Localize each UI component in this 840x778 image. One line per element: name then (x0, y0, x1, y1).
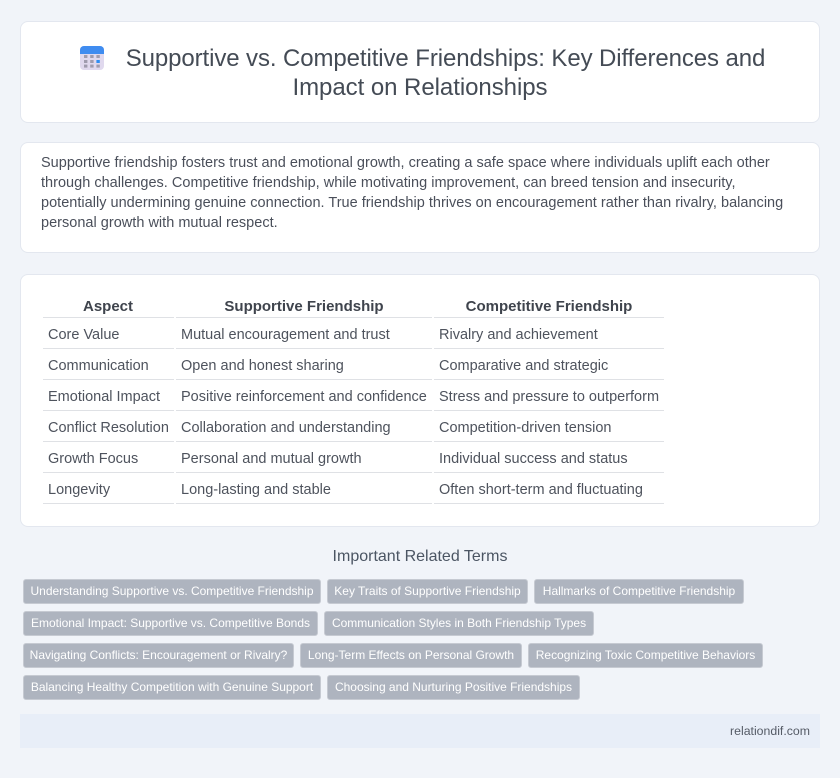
tag: Recognizing Toxic Competitive Behaviors (536, 648, 755, 662)
cell: competitive growth focus: Individual success and status (439, 451, 628, 467)
row: Communication: Communication (48, 358, 149, 374)
cell: supportive core value: Mutual encouragement and trust (181, 327, 390, 343)
tag (534, 579, 744, 604)
tag (23, 579, 321, 604)
panel: title header (20, 21, 820, 123)
footer bar (20, 714, 820, 748)
tag (300, 643, 522, 668)
tag: Balancing Healthy Competition with Genuine Support (31, 680, 313, 694)
cell: supportive longevity: Long-lasting and stable (181, 482, 331, 498)
row: Core Value: Core Value (48, 327, 119, 343)
tag: Navigating Conflicts: Encouragement or Rivalry? (30, 648, 287, 662)
text: summary line 4: personal growth with mutual respect. (41, 215, 278, 231)
tag: Emotional Impact: Supportive vs. Competitive Bonds (31, 616, 310, 630)
row: Longevity: Longevity (48, 482, 110, 498)
title second line: Impact on Relationships (292, 74, 548, 101)
footer source link: relationdif.com (730, 724, 810, 738)
cell: competitive emotional impact: Stress and pressure to outperform (439, 389, 659, 405)
text: summary line 2: through challenges. Competitive friendship, while motivating improvement, can breed tension and insecurity, (41, 175, 735, 191)
tag list: related terms (23, 579, 763, 700)
cell: supportive growth focus: Personal and mutual growth (181, 451, 362, 467)
text: summary line 1: Supportive friendship fosters trust and emotional growth, creating a safe space where individuals uplift each other (41, 155, 770, 171)
tag (23, 643, 294, 668)
table: comparison (43, 298, 664, 504)
icon: calendar (80, 46, 104, 70)
row: Growth Focus: Growth Focus (48, 451, 138, 467)
tag (324, 611, 594, 636)
tag (23, 675, 321, 700)
cell: supportive emotional impact: Positive reinforcement and confidence (181, 389, 427, 405)
heading: related terms: Important Related Terms (333, 548, 507, 565)
title: Supportive vs. Competitive Friendships: Key Differences and (126, 45, 765, 72)
tag: Long-Term Effects on Personal Growth (308, 648, 514, 662)
panel: comparison table (20, 274, 820, 527)
cell: competitive conflict resolution: Competition-driven tension (439, 420, 611, 436)
cell: competitive core value: Rivalry and achievement (439, 327, 598, 343)
tag: Choosing and Nurturing Positive Friendships (335, 680, 572, 694)
tag: Communication Styles in Both Friendship Types (332, 616, 586, 630)
tag (528, 643, 763, 668)
tag (327, 675, 580, 700)
tag (23, 611, 318, 636)
text: summary line 3: potentially undermining genuine connection. True friendship thrives on encouragement rather than rivalry, balancing (41, 195, 783, 211)
cell: supportive conflict resolution: Collaboration and understanding (181, 420, 391, 436)
cell: competitive communication: Comparative and strategic (439, 358, 608, 374)
cell: competitive longevity: Often short-term and fluctuating (439, 482, 643, 498)
row: Emotional Impact: Emotional Impact (48, 389, 160, 405)
tag (327, 579, 528, 604)
row: Conflict Resolution: Conflict Resolution (48, 420, 169, 436)
tag: Understanding Supportive vs. Competitive Friendship (31, 584, 313, 598)
table header: Competitive Friendship: Competitive Friendship (466, 298, 632, 315)
cell: supportive communication: Open and honest sharing (181, 358, 344, 374)
table header: Aspect: Aspect (83, 298, 133, 315)
panel: summary (20, 142, 820, 253)
tag: Key Traits of Supportive Friendship (334, 584, 521, 598)
tag: Hallmarks of Competitive Friendship (543, 584, 735, 598)
table header: Supportive Friendship: Supportive Friendship (224, 298, 384, 315)
